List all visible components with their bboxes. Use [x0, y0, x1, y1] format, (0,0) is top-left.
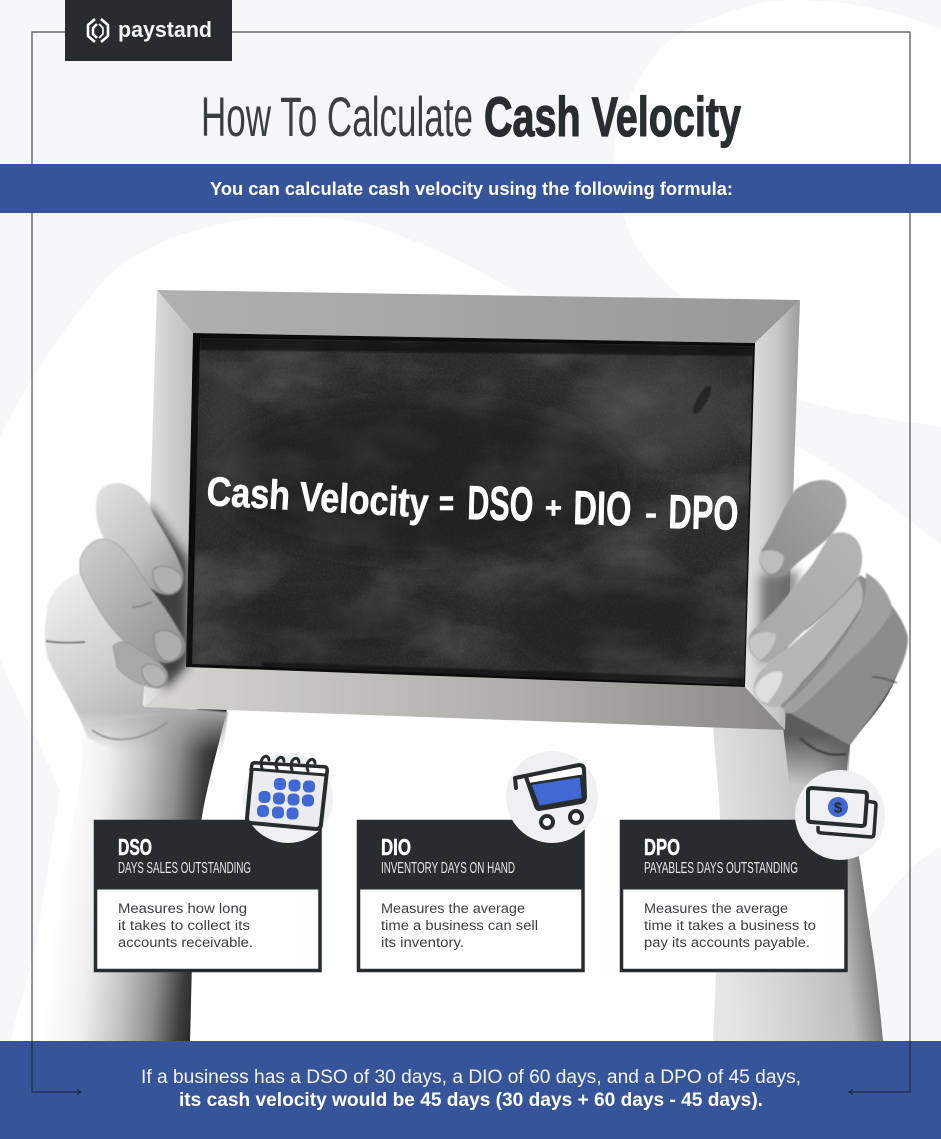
card: DSO: it takes to collect its [118, 918, 250, 933]
subtitle band: You can calculate cash velocity using the following formula: [210, 179, 733, 199]
card: DIO: time a business can sell [381, 918, 538, 933]
logo wordmark: paystand [118, 17, 212, 42]
right arm [713, 715, 883, 1041]
right hand fingers [748, 480, 908, 745]
subtitle band [0, 164, 941, 213]
right hand back [783, 672, 898, 782]
left frame arrow [32, 1041, 81, 1094]
chalk formula: DPO [668, 486, 739, 541]
footer band [0, 1041, 941, 1139]
card: DPO: pay its accounts payable. [644, 935, 810, 950]
card: DIO: Measures the average [381, 901, 525, 916]
left hand shadow [140, 503, 188, 690]
card: DIO: INVENTORY DAYS ON HAND [381, 860, 515, 877]
icon: shopping cart [506, 751, 598, 843]
chalk formula: = [439, 482, 454, 523]
chalk formula: - [645, 495, 657, 531]
card: DSO [94, 820, 322, 970]
chalk formula: DIO [573, 482, 632, 537]
icon: banknotes: $ [834, 800, 843, 816]
card: DIO: DIO [381, 834, 411, 860]
logo block [65, 0, 232, 61]
card: DSO: Measures how long [118, 901, 247, 916]
chalk formula: Cash Velocity [205, 468, 430, 526]
card: DSO: accounts receivable. [118, 935, 253, 950]
photo: hands holding a chalkboard [33, 290, 908, 1041]
icon: calendar [243, 753, 333, 843]
left wrist crease [92, 722, 168, 739]
card: DSO: DSO [118, 834, 152, 860]
icon: paystand mark [88, 19, 108, 42]
card: DPO: time it takes a business to [644, 918, 816, 933]
left arm [33, 705, 228, 1041]
right frame arrow [849, 1041, 910, 1094]
chalk formula: DSO [467, 477, 534, 532]
left palm [45, 573, 228, 755]
right wrist crease [800, 738, 846, 755]
right hand shadow [760, 570, 800, 665]
chalkboard surface [186, 333, 755, 687]
card: DPO: DPO [644, 834, 680, 860]
chalk formula [205, 468, 739, 541]
card: DPO [620, 820, 848, 970]
card: DPO: Measures the average [644, 901, 788, 916]
footer example text: If a business has a DSO of 30 days, a DIO of 60 days, and a DPO of 45 days, [141, 1067, 801, 1088]
card: DPO: PAYABLES DAYS OUTSTANDING [644, 860, 798, 877]
left hand fingers [46, 483, 185, 688]
chalk formula: + [545, 492, 562, 525]
icon: banknotes [795, 770, 885, 860]
card: DIO: its inventory. [381, 935, 464, 950]
title: How To Calculate [201, 85, 473, 148]
chalkboard frame [144, 290, 800, 730]
card: DIO [357, 820, 584, 970]
card: DSO: DAYS SALES OUTSTANDING [118, 860, 251, 877]
title: Cash Velocity [484, 85, 741, 148]
footer band: its cash velocity would be 45 days (30 days + 60 days - 45 days). [179, 1090, 763, 1111]
